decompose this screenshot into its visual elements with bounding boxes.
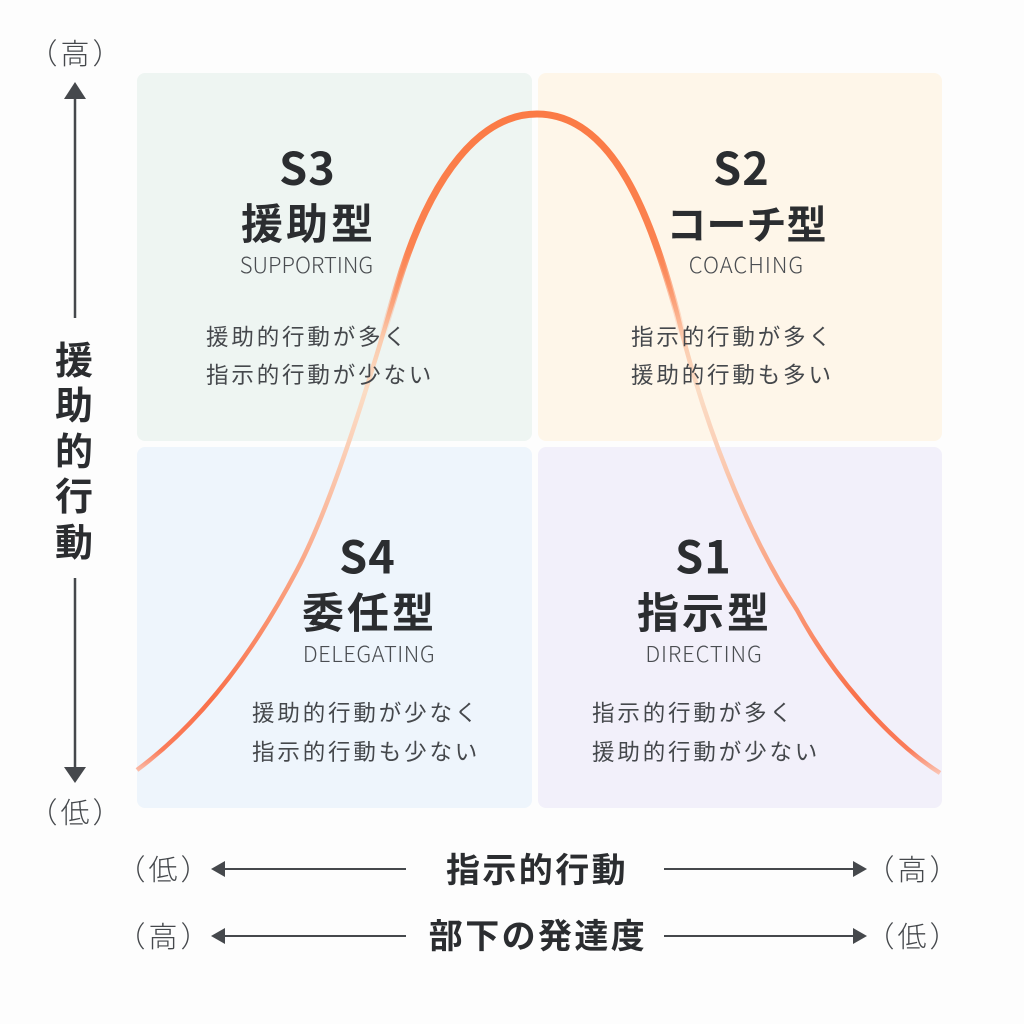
S3 text block: 指示的行動が少ない <box>206 358 434 390</box>
panel: S4 delegating <box>137 447 532 808</box>
S1 text block <box>592 522 820 767</box>
horizontal axis: directive behaviour: （高） <box>865 847 962 889</box>
vertical axis: support behaviour: 援 <box>55 330 93 385</box>
horizontal axis: directive behaviour: （低） <box>116 847 213 889</box>
S4 text block <box>252 522 480 767</box>
S2 text block: S2 <box>713 133 770 198</box>
S4 text block: 援助的行動が少なく <box>252 696 480 728</box>
horizontal axis: subordinate development: （高） <box>116 914 213 956</box>
S3 text block: 援助型 <box>241 191 376 252</box>
vertical axis: support behaviour: （高） <box>28 31 125 73</box>
horizontal axis: directive behaviour: 指示的行動 <box>446 843 628 892</box>
S3 text block <box>206 133 434 390</box>
S1 text block: 援助的行動が少ない <box>592 735 820 767</box>
S4 text block: S4 <box>339 522 396 586</box>
S2 text block: 援助的行動も多い <box>631 358 834 390</box>
vertical axis: support behaviour: 助 <box>55 375 93 430</box>
vertical axis: support behaviour: （低） <box>28 790 125 832</box>
S4 text block: DELEGATING <box>303 637 435 669</box>
panel: S1 directing <box>538 447 942 808</box>
S1 text block: S1 <box>675 522 732 586</box>
S2 text block: コーチ型 <box>666 193 826 251</box>
S2 text block: COACHING <box>689 248 804 280</box>
horizontal axis: subordinate development: （低） <box>865 914 962 956</box>
horizontal axis: subordinate development: 部下の発達度 <box>429 909 647 958</box>
S1 text block: 指示的行動が多く <box>592 696 795 728</box>
S1 text block: 指示型 <box>637 580 772 641</box>
vertical axis: support behaviour: 行 <box>55 466 93 521</box>
S3 text block: SUPPORTING <box>240 248 373 280</box>
S4 text block: 指示的行動も少ない <box>252 735 480 767</box>
vertical axis: support behaviour: 動 <box>55 512 93 567</box>
bell curve <box>137 114 940 773</box>
horizontal axis: directive behaviour <box>116 843 962 892</box>
horizontal axis: subordinate development <box>116 909 962 958</box>
S4 text block: 委任型 <box>302 580 437 641</box>
panel: S3 supporting <box>137 73 532 441</box>
S2 text block <box>631 133 834 390</box>
S2 text block: 指示的行動が多く <box>631 320 834 352</box>
S3 text block: 援助的行動が多く <box>206 320 409 352</box>
S1 text block: DIRECTING <box>645 637 763 669</box>
panel: S2 coaching <box>538 73 942 441</box>
vertical axis: support behaviour: 的 <box>55 421 93 476</box>
S3 text block: S3 <box>279 133 336 198</box>
vertical axis: support behaviour <box>28 31 125 832</box>
